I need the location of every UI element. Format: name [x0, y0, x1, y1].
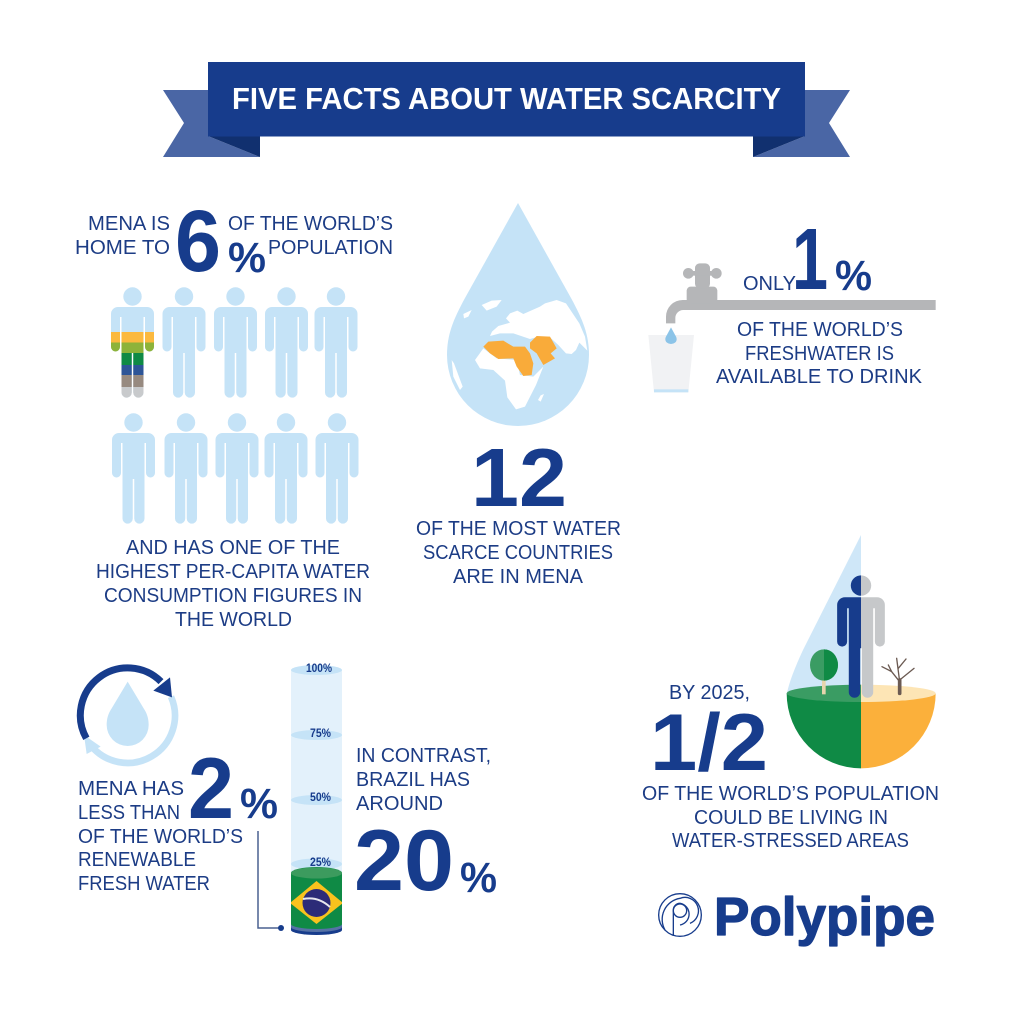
title banner: [163, 62, 850, 157]
panel: half of population: [642, 535, 939, 852]
freshwater text: AVAILABLE TO DRINK: [716, 366, 923, 388]
scale labels: [306, 663, 332, 869]
ground: [787, 649, 936, 768]
heading text: MENA is home to 6%: MENA IS: [88, 213, 170, 235]
renewable water text: OF THE WORLD’S: [78, 826, 243, 848]
consumption text: CONSUMPTION FIGURES IN: [104, 585, 362, 607]
renewable water text: [78, 778, 243, 895]
panel: 1% freshwater: [648, 211, 936, 392]
cylinder: [290, 663, 343, 935]
banner right ribbon: [753, 90, 850, 157]
scale labels: 25%: [310, 857, 331, 869]
logo wordmark: Polypipe: [714, 887, 935, 947]
panel: 12 water scarce countries: [416, 203, 621, 588]
number 1/2: 1/2: [650, 698, 768, 788]
panel: MENA population: [75, 193, 393, 631]
population text: WATER-STRESSED AREAS: [672, 830, 909, 852]
ONLY 1%: ONLY: [743, 273, 796, 295]
base: [291, 924, 342, 935]
countries text: ARE IN MENA: [453, 566, 584, 588]
logo: Polypipe: [659, 887, 935, 947]
countries text: SCARCE COUNTRIES: [423, 542, 613, 564]
ONLY 1%: [743, 211, 872, 308]
logo mark: [659, 894, 701, 936]
consumption text: HIGHEST PER-CAPITA WATER: [96, 561, 370, 583]
green tree: [822, 678, 826, 694]
ONLY 1%: 1: [792, 211, 828, 308]
banner right fold: [753, 136, 805, 157]
number 2%: %: [240, 780, 278, 828]
scale labels: 100%: [306, 663, 332, 675]
freshwater text: [716, 319, 923, 388]
renewable water text: LESS THAN: [78, 802, 180, 824]
number 2%: 2: [188, 741, 234, 837]
icon: tap and glass: [648, 263, 936, 392]
renewable water text: MENA HAS: [78, 778, 184, 800]
heading text: MENA is home to 6%: 6: [175, 193, 221, 290]
people pictogram: [111, 287, 358, 524]
half drop: [787, 535, 861, 693]
BY 2025: BY 2025,: [669, 682, 750, 704]
Brazil text: BRAZIL HAS: [356, 769, 470, 791]
Brazil text: AROUND: [356, 793, 443, 815]
ONLY 1%: %: [835, 252, 872, 300]
coloured person: [111, 287, 154, 398]
panel: 2% renewable fresh water: [78, 668, 284, 931]
heading text: MENA is home to 6%: POPULATION: [268, 237, 393, 259]
leader line: [258, 831, 284, 931]
banner left ribbon: [163, 90, 260, 157]
heading text: MENA is home to 6%: %: [228, 234, 266, 282]
consumption text: THE WORLD: [175, 609, 292, 631]
heading text: MENA is home to 6%: HOME TO: [75, 237, 170, 259]
glass: [648, 335, 694, 392]
MENA arabia: [530, 336, 557, 365]
renewable water text: FRESH WATER: [78, 873, 210, 895]
MENA north africa: [483, 341, 533, 376]
number 20%: 20: [354, 813, 454, 909]
banner main: [208, 62, 805, 136]
renewable water text: RENEWABLE: [78, 849, 196, 871]
heading text: MENA is home to 6%: OF THE WORLD’S: [228, 213, 393, 235]
number 20%: %: [460, 854, 497, 902]
water drop: [665, 327, 677, 344]
base highlight band: [291, 924, 342, 932]
icon: globe water drop: [447, 203, 589, 426]
freshwater text: OF THE WORLD’S: [737, 319, 903, 341]
population text: OF THE WORLD’S POPULATION: [642, 783, 939, 805]
number 12: 12: [471, 431, 567, 524]
population text: COULD BE LIVING IN: [694, 807, 888, 829]
brazil flag fill: [290, 865, 343, 930]
world map: [452, 300, 587, 409]
person right half: [861, 575, 885, 698]
Brazil text: IN CONTRAST,: [356, 745, 491, 767]
Brazil text: [356, 745, 491, 815]
bare tree: [882, 658, 914, 693]
icon: water cycle: [80, 668, 175, 763]
banner left fold: [208, 136, 260, 157]
consumption text: AND HAS ONE OF THE: [126, 537, 340, 559]
panel: Brazil cylinder chart: [290, 663, 497, 935]
scale labels: 50%: [310, 792, 331, 804]
countries text: OF THE MOST WATER: [416, 518, 621, 540]
scale labels: 75%: [310, 728, 331, 740]
countries text: [416, 518, 621, 588]
heading text: MENA is home to 6%: [75, 193, 393, 290]
tap: [666, 263, 936, 323]
icon: half drop and person: [787, 535, 936, 768]
freshwater text: FRESHWATER IS: [745, 343, 894, 365]
person left half: [837, 575, 861, 698]
consumption text: [96, 537, 370, 631]
number 2%: [188, 741, 278, 837]
population text: [642, 783, 939, 852]
number 20%: [354, 813, 497, 909]
title: FIVE FACTS ABOUT WATER SCARCITY: [232, 81, 781, 116]
